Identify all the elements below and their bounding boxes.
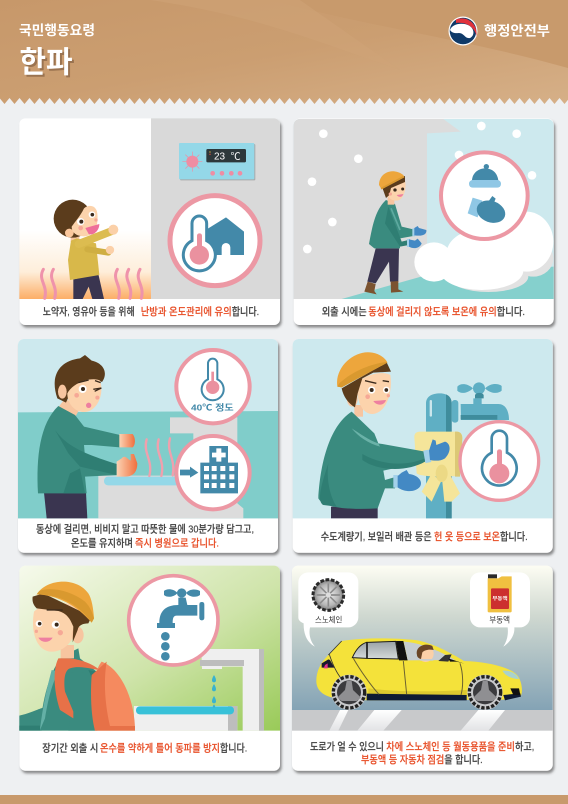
caption: panel 1: 난방과 온도관리에 유의 [141,305,232,318]
caption: panel 2: 동상에 걸리지 않도록 보온에 유의 [368,305,497,318]
caption: panel 3: 동상에 걸리면, 비비지 말고 따뜻한 물에 30분가량 담그고, [36,522,254,536]
icon: government taegeuk logo [448,16,478,46]
caption: panel 5: 장기간 외출 시 [42,742,98,754]
caption: panel 4 [321,530,528,543]
panel: heating and temperature [19,118,280,325]
panel: going outside, keep warm [294,118,554,325]
callout: antifreeze [470,572,530,647]
callout: antifreeze: 부동액 [489,614,510,624]
illustration: panel 2 scene [294,119,554,299]
illustration: panel 6 scene [292,566,553,731]
callout: antifreeze: 부동액 [492,595,508,602]
caption: panel 2 [322,305,525,318]
panel: frostbite treatment [18,339,278,553]
caption: panel 3 [36,522,254,550]
heading: campaign label: 국민행동요령 [19,23,95,38]
caption: panel 4: 헌 옷 등으로 보온 [434,531,500,543]
caption: panel 1: 합니다. [232,305,259,318]
panel: insulate water meter and pipes [293,339,553,553]
illustration: panel 3 scene [18,339,278,518]
caption: panel 4: 합니다. [500,530,528,543]
illustration: panel 5 scene [19,566,280,731]
caption: panel 6 [310,740,534,766]
organization name: 행정안전부 [484,24,550,38]
illustration: panel 3 scene: 40℃ 정도 [191,403,234,413]
illustration: panel 4 scene [293,339,553,518]
callout: snow chain: 스노체인 [315,614,342,624]
caption: panel 3: 온도를 유지하며 [71,536,133,550]
title: 한파 [22,48,74,82]
caption: panel 3: 즉시 병원으로 갑니다. [135,536,219,550]
title: 한파 [20,46,72,80]
caption: panel 5 [42,742,247,754]
illustration: yellow car [316,638,522,710]
caption: panel 6: 부동액 등 자동차 점검 [361,753,444,766]
caption: panel 5: 합니다. [220,742,247,754]
caption: panel 6: 하고, [515,740,534,753]
caption: panel 6: 차에 스노체인 등 월동용품을 준비 [386,741,515,753]
caption: panel 5: 온수를 약하게 틀어 동파를 방지 [100,742,220,754]
caption: panel 2: 외출 시에는 [322,306,367,318]
callout: snow chain [298,572,358,647]
caption: panel 4: 수도계량기, 보일러 배관 등은 [321,530,432,543]
panel: winter car preparation [292,566,553,771]
caption: panel 6: 도로가 얼 수 있으니 [310,740,384,753]
illustration: panel 1 scene: 23 [214,151,226,162]
illustration: panel 1 scene: ℃ [231,152,241,163]
panel: prevent freezing while away [19,566,280,771]
header band [0,0,568,104]
caption: panel 2: 합니다. [497,305,525,318]
caption: panel 1: 노약자, 영유아 등을 위해 [43,305,135,318]
illustration: panel 1 scene [19,118,280,299]
caption: panel 1 [43,305,259,318]
caption: panel 6: 을 합니다. [444,753,483,766]
footer band [0,795,568,804]
